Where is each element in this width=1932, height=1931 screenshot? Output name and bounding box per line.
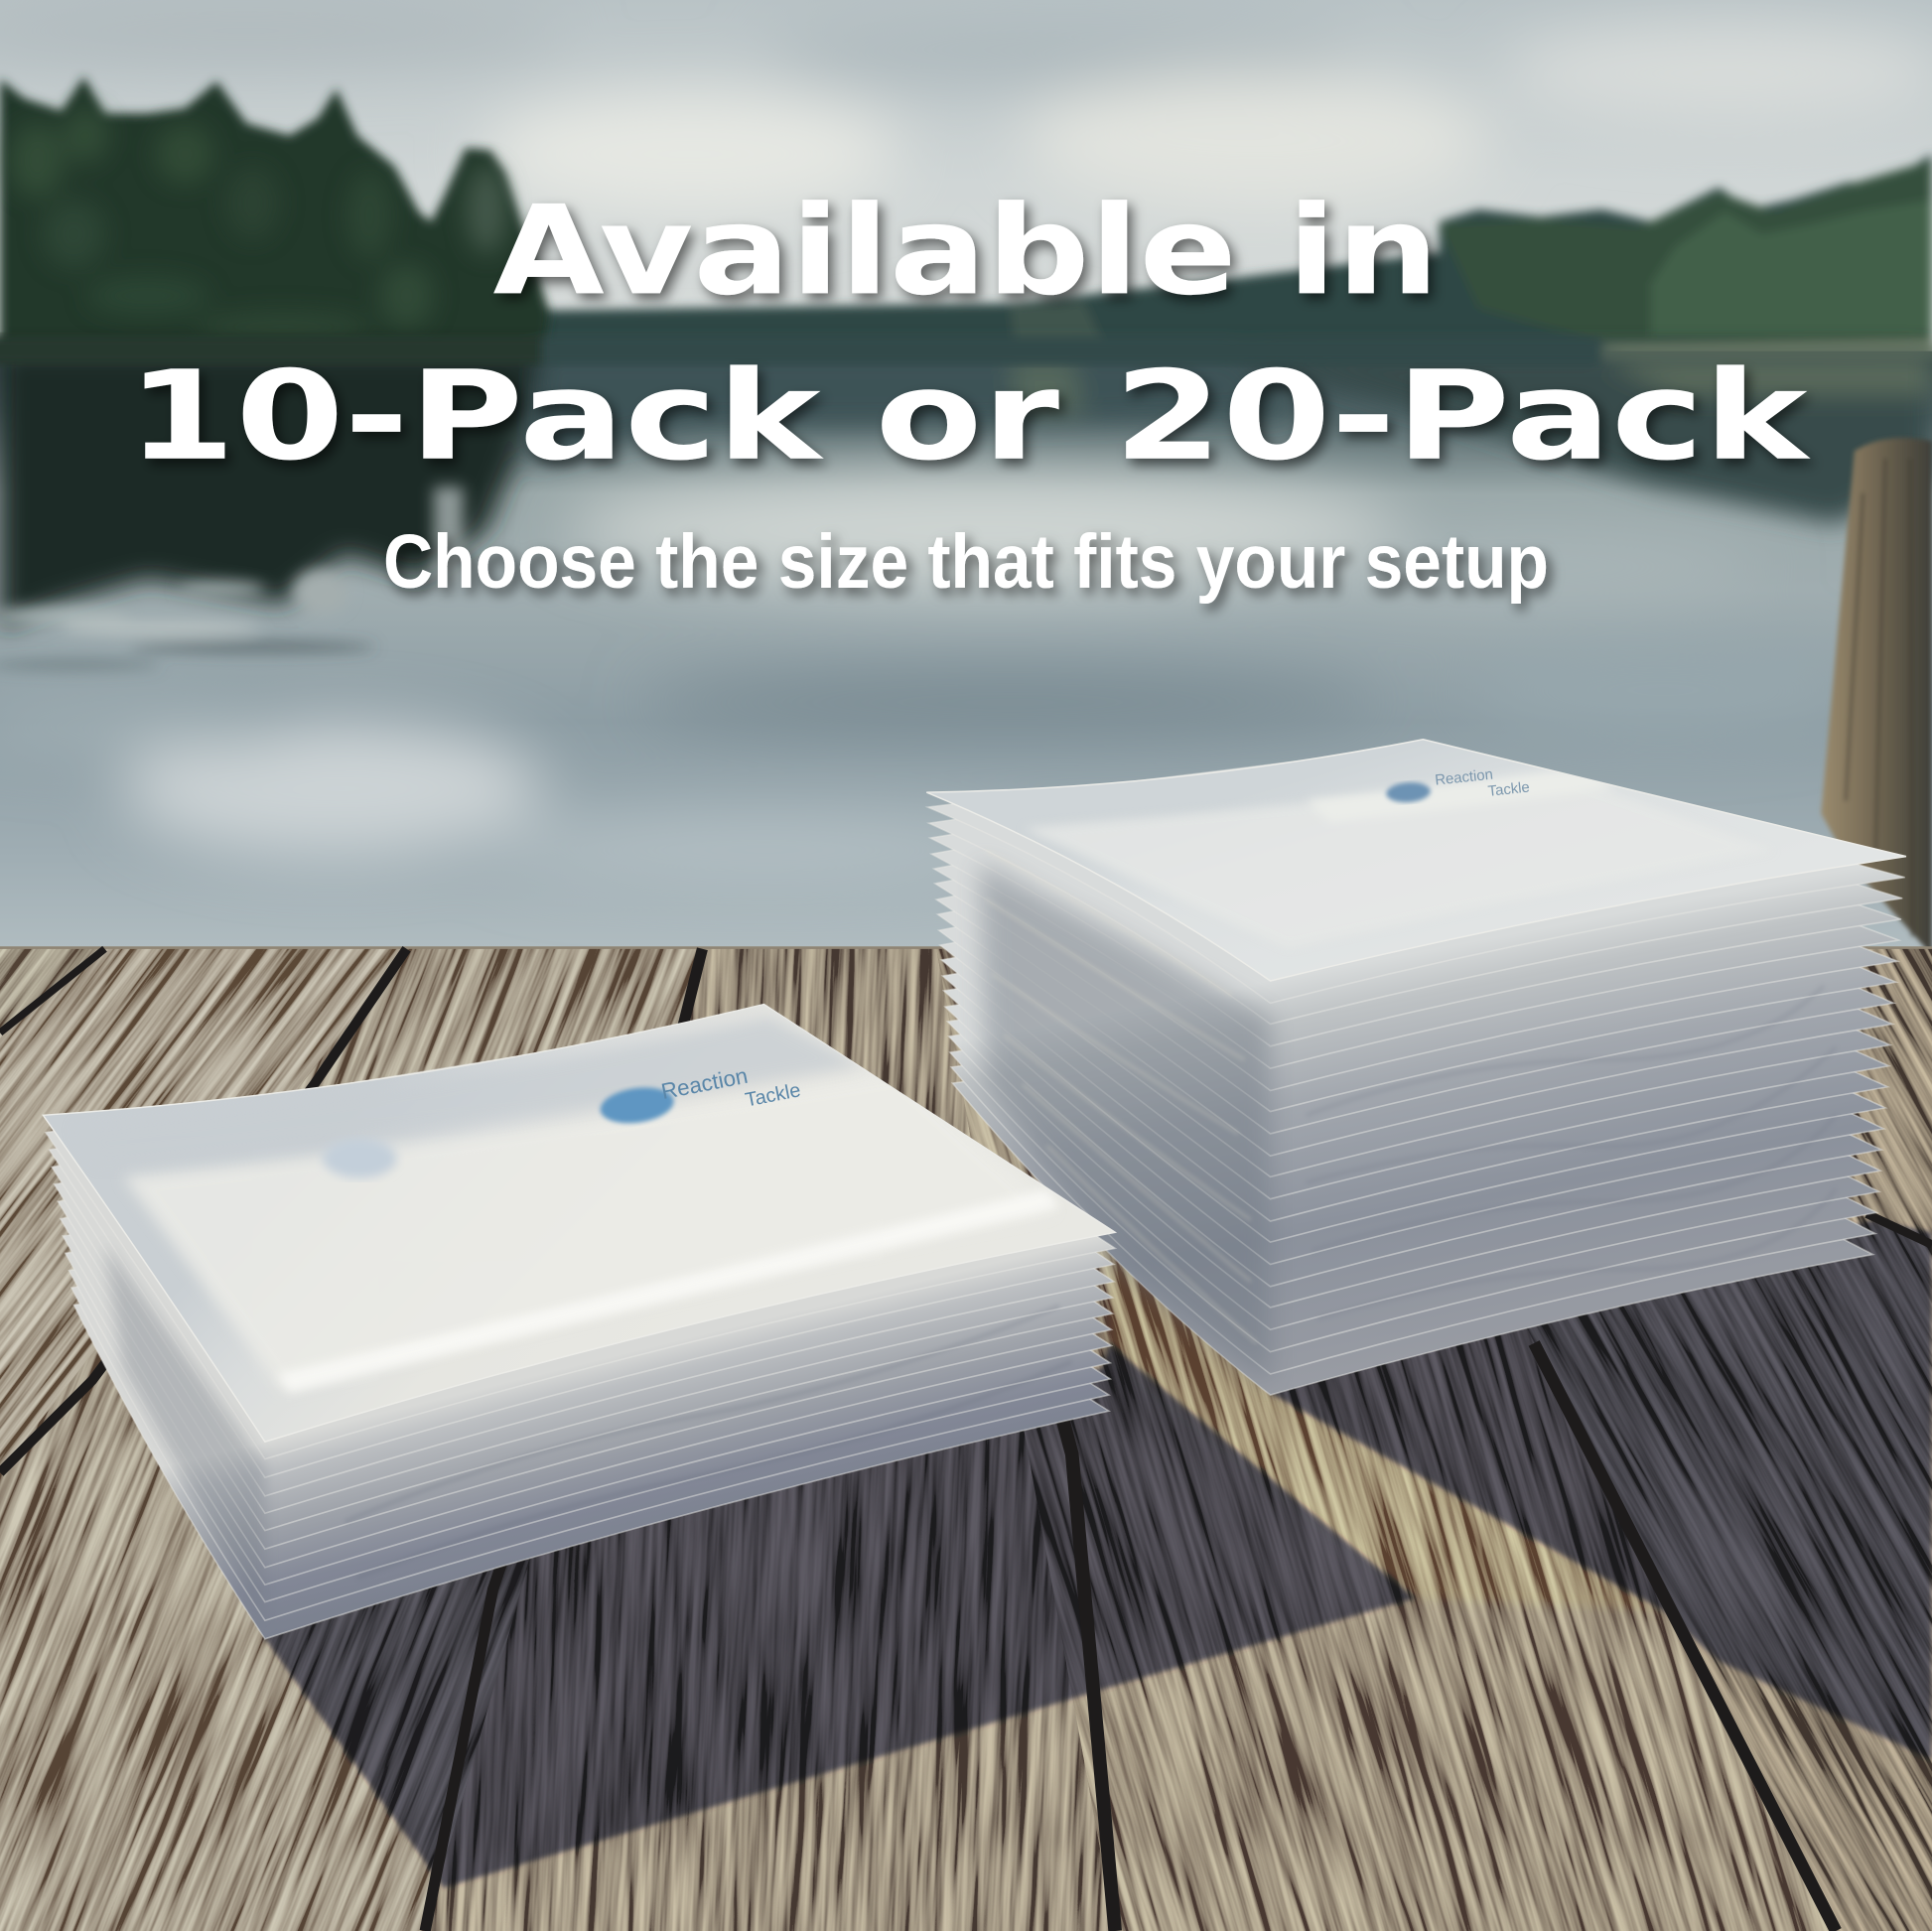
top bag: 10-pack: [43, 1005, 1115, 1442]
subtitle: Choose the size that fits your setup: [383, 519, 1549, 605]
printed logo: 10-pack: Reaction: [659, 1063, 750, 1104]
bag layers: 20-pack: [928, 746, 1905, 1395]
printed logo: 20-pack: [1386, 767, 1531, 804]
10-pack bag stack: [43, 1005, 1115, 1639]
cast shadows on dock: [265, 1220, 1932, 1888]
far treeline: [530, 154, 1932, 369]
wooden post: [1821, 438, 1932, 955]
title line 2: 10-Pack or 20-Pack: [127, 345, 1811, 488]
title line 1: Available in: [492, 180, 1440, 323]
lake water with reflections: [0, 336, 1932, 955]
wrinkles: 10-pack: [345, 1307, 1072, 1578]
title and subtitle: [127, 180, 1811, 605]
20-pack bag stack: [926, 740, 1906, 1395]
printed logo: 10-pack: [598, 1063, 802, 1128]
plank gaps: [0, 949, 1932, 1931]
printed logo: 20-pack: Reaction: [1435, 767, 1494, 789]
sky with clouds: [0, 0, 1932, 369]
wrinkles: 20-pack: [1307, 986, 1836, 1318]
bag layers: 10-pack: [46, 1017, 1115, 1639]
printed logo: 20-pack: Tackle: [1487, 779, 1531, 800]
printed logo: 10-pack: Tackle: [744, 1079, 802, 1112]
wood grain texture: [0, 949, 1932, 1931]
shoreline seam softening: [0, 336, 1932, 364]
left face shading: 20-pack: [980, 850, 1271, 1386]
top bag: 20-pack: [926, 740, 1906, 981]
left face shading: 10-pack: [104, 1245, 265, 1626]
left forest: [0, 76, 550, 359]
wooden dock planks: [0, 946, 1932, 1931]
